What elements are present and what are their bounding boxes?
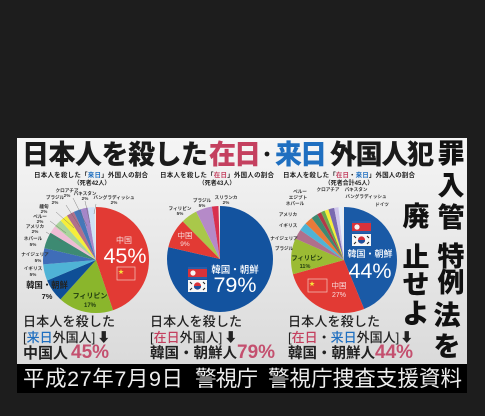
vertical slogan: 罪 — [438, 139, 464, 169]
title: 日本人を殺した — [22, 140, 208, 170]
pie subtitle: combined: 日本人を殺した「在日・来日」外国人の割合 — [283, 170, 416, 179]
pie labels: zainichi minor nationalities: ブラジル — [193, 197, 212, 204]
caption: combined: 日本人を殺した — [288, 314, 380, 329]
pie labels: zainichi minor nationalities: 5% — [177, 211, 183, 216]
pie labels: rainichi minor nationalities: アメリカ — [26, 223, 44, 230]
icon: China flag — [308, 279, 327, 292]
pie labels: rainichi minor nationalities: 2% — [37, 219, 43, 224]
pie labels: combined minor nationalities: ブラジル — [275, 245, 294, 252]
pie subtitle: rainichi — [34, 170, 148, 187]
pie labels: combined minor nationalities: パキスタン — [345, 186, 368, 193]
vertical slogan: 止 — [402, 243, 430, 273]
title: 外国人犯 — [330, 140, 434, 170]
pie chart: rainichi — [70, 234, 147, 309]
label: China 9%: 9% — [180, 241, 190, 248]
pie labels: zainichi minor nationalities: 2% — [223, 200, 229, 205]
caption: rainichi: 中国人45% — [23, 342, 109, 363]
label: China 9%: 中国 — [178, 230, 192, 240]
pie labels: rainichi minor nationalities: 5% — [35, 258, 41, 263]
pie chart: zainichi — [178, 230, 259, 297]
label: Korea 79% — [211, 264, 259, 297]
caption: zainichi: 日本人を殺した — [150, 314, 242, 329]
title: 在日 — [209, 140, 261, 170]
pie labels: rainichi minor nationalities: 5% — [30, 242, 36, 247]
pie chart: combined — [291, 221, 393, 299]
pie labels: rainichi minor nationalities: 韓国・朝鮮 — [26, 280, 68, 290]
label: China 27%: 27% — [332, 292, 346, 299]
label: China 45%: 45% — [103, 244, 147, 268]
pie labels: combined minor nationalities: バングラディッシュ — [345, 193, 387, 200]
label: China 27%: 中国 — [332, 280, 346, 290]
vertical slogan: 廃 — [402, 202, 430, 232]
caption: zainichi: [在日外国人]⬇ — [150, 330, 237, 345]
vertical slogan: 例 — [438, 268, 464, 298]
pie labels: rainichi minor nationalities: ペルー — [33, 214, 47, 219]
pie labels: rainichi minor nationalities — [21, 187, 135, 301]
vertical slogan — [402, 139, 464, 362]
label: Philippines 17%: 17% — [84, 303, 97, 309]
background panel — [17, 138, 467, 365]
caption: zainichi: 韓国・朝鮮人79% — [150, 342, 275, 363]
footer bar: 警視庁捜査支援資料 — [268, 367, 462, 391]
pie subtitle: zainichi: （死者43人） — [199, 179, 235, 187]
pie labels: rainichi minor nationalities: 2% — [82, 196, 88, 201]
pie labels: zainichi minor nationalities — [169, 194, 237, 216]
pie labels: combined minor nationalities: ネパール — [286, 200, 305, 207]
label: Philippines 11%: 11% — [300, 264, 310, 270]
pie subtitle: combined: （死者合計45人） — [325, 179, 373, 187]
pie labels: combined minor nationalities: ドイツ — [375, 202, 389, 207]
pie subtitle: rainichi: （死者42人） — [74, 179, 110, 187]
caption: rainichi: 日本人を殺した — [23, 314, 115, 329]
pie labels: combined minor nationalities: エジプト — [289, 194, 307, 201]
label: Korea 79%: 79% — [213, 273, 257, 297]
pie labels: zainichi minor nationalities: スリランカ — [215, 194, 237, 201]
title — [22, 140, 434, 170]
caption: combined: [在日・来日外国人]⬇ — [288, 330, 413, 345]
caption: combined — [288, 314, 413, 363]
pie subtitle: zainichi — [160, 170, 274, 187]
label: China 9% — [178, 230, 192, 248]
icon: North Korea flag — [188, 267, 207, 279]
vertical slogan: 法 — [434, 301, 460, 331]
label: Korea 44%: 韓国・朝鮮 — [347, 248, 393, 259]
vertical slogan: よ — [402, 299, 430, 329]
pie labels: rainichi minor nationalities: 2% — [111, 200, 117, 205]
label: Korea 44%: 44% — [348, 259, 392, 283]
label: China 27% — [332, 280, 346, 299]
title: 来日 — [275, 140, 327, 170]
vertical slogan: 入 — [438, 171, 464, 201]
footer bar — [17, 364, 467, 393]
pie subtitle: combined — [283, 170, 416, 187]
pie labels: rainichi minor nationalities: ブラジル — [46, 194, 65, 201]
caption: combined: 韓国・朝鮮人44% — [288, 342, 413, 363]
pie labels: rainichi minor nationalities: 2% — [52, 200, 58, 205]
label: Philippines 11% — [291, 254, 323, 270]
label: Philippines 17%: フィリピン — [73, 292, 107, 300]
pie labels: rainichi minor nationalities: 2% — [41, 209, 47, 214]
caption: zainichi — [150, 314, 275, 363]
pie labels: rainichi minor nationalities: 2% — [64, 193, 70, 198]
vertical slogan: 管 — [438, 202, 464, 233]
icon: South Korea flag — [188, 280, 207, 292]
pie subtitle: rainichi: 日本人を殺した「来日」外国人の割合 — [34, 170, 148, 179]
pie labels: rainichi minor nationalities: クロアチア — [56, 187, 79, 194]
pie labels: combined minor nationalities: イギリス — [279, 223, 298, 229]
pie labels: rainichi minor nationalities: 5% — [30, 272, 36, 277]
label: Philippines 17% — [73, 292, 107, 309]
pie labels: zainichi minor nationalities: フィリピン — [169, 206, 192, 212]
footer bar: 警視庁 — [195, 367, 258, 391]
footer bar: 平成27年7月9日 — [23, 367, 183, 391]
pie labels: rainichi minor nationalities: ナイジェリア — [21, 252, 49, 258]
pie labels: rainichi minor nationalities: 緬甸 — [39, 203, 49, 210]
pie labels: rainichi minor nationalities: バングラディッシュ — [93, 194, 135, 201]
pie labels: rainichi minor nationalities: 7% — [42, 292, 53, 301]
pie labels: zainichi minor nationalities: 5% — [199, 203, 205, 208]
caption: rainichi — [23, 314, 115, 363]
pie labels: rainichi minor nationalities: ネパール — [24, 235, 43, 242]
icon: South Korea flag — [352, 234, 371, 246]
caption: rainichi: [来日外国人]⬇ — [23, 330, 110, 345]
icon: China flag — [117, 267, 135, 280]
icon: North Korea flag — [352, 221, 371, 233]
vertical slogan: を — [434, 332, 460, 362]
pie labels: combined minor nationalities: ペルー — [293, 189, 307, 194]
label: China 45%: 中国 — [116, 235, 132, 245]
pie labels: combined minor nationalities — [270, 186, 389, 252]
label: Korea 44% — [347, 248, 393, 283]
pie labels: combined minor nationalities: クロアチア — [317, 186, 340, 193]
pie labels: rainichi minor nationalities: イギリス — [24, 266, 43, 272]
pie labels: rainichi minor nationalities: パキスタン — [74, 190, 97, 197]
pie labels: combined minor nationalities: アメリカ — [279, 211, 297, 218]
vertical slogan: 特 — [438, 242, 464, 272]
label: Korea 79%: 韓国・朝鮮 — [211, 264, 259, 276]
pie subtitle: zainichi: 日本人を殺した「在日」外国人の割合 — [160, 170, 274, 179]
label: Philippines 11%: フィリピン — [291, 254, 323, 262]
pie labels: rainichi minor nationalities: 2% — [32, 229, 38, 234]
vertical slogan: せ — [402, 270, 430, 300]
pie labels: combined minor nationalities: ナイジェリア — [270, 236, 298, 242]
